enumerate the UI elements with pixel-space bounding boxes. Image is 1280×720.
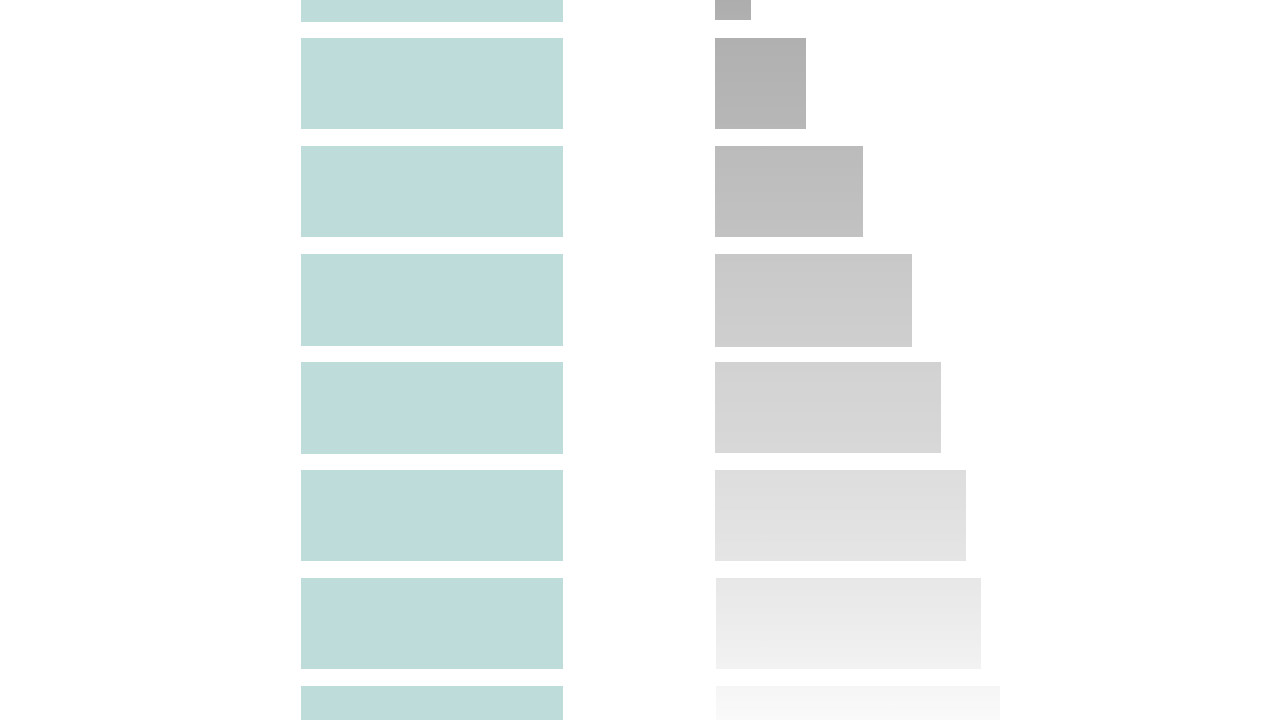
grey bar 3 xyxy=(715,146,863,237)
grey bar 7 xyxy=(716,578,981,669)
grey bar 5 xyxy=(715,362,941,453)
teal bar 2 xyxy=(301,38,563,129)
teal bar 8 xyxy=(301,686,563,720)
teal bar 1 xyxy=(301,0,563,22)
grey stepped bars xyxy=(715,0,1000,700)
teal column bars xyxy=(301,0,563,720)
teal bar 7 xyxy=(301,578,563,669)
grey bar 2 xyxy=(715,38,806,129)
teal bar 3 xyxy=(301,146,563,237)
teal bar 4 xyxy=(301,254,563,346)
grey bar 1 xyxy=(715,0,751,20)
teal bar 5 xyxy=(301,362,563,454)
grey bar 8 xyxy=(716,686,1000,720)
teal bar 6 xyxy=(301,470,563,561)
grey bar 6 xyxy=(715,470,966,561)
grey bar 4 xyxy=(715,254,912,347)
